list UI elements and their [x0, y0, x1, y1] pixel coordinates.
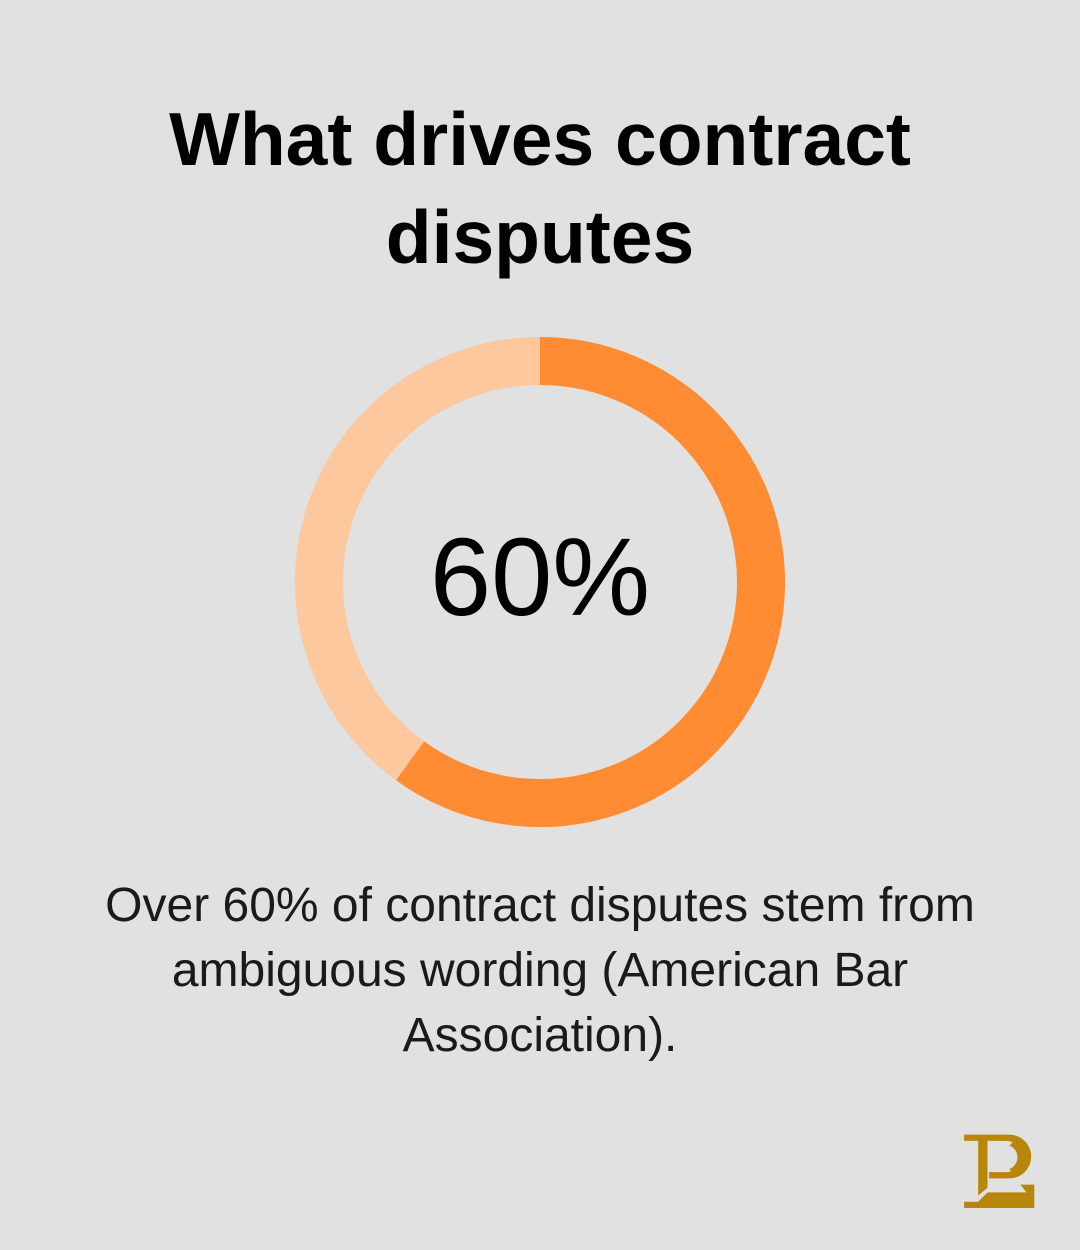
description: Over 60% of contract disputes stem from	[105, 879, 975, 932]
title: disputes	[386, 195, 694, 279]
description: ambiguous wording (American Bar	[172, 944, 908, 997]
donut chart: 60%	[430, 516, 650, 639]
description	[105, 879, 975, 1062]
title	[169, 97, 911, 279]
logo	[964, 1134, 1034, 1208]
title: What drives contract	[169, 97, 911, 181]
description: Association).	[403, 1009, 677, 1062]
